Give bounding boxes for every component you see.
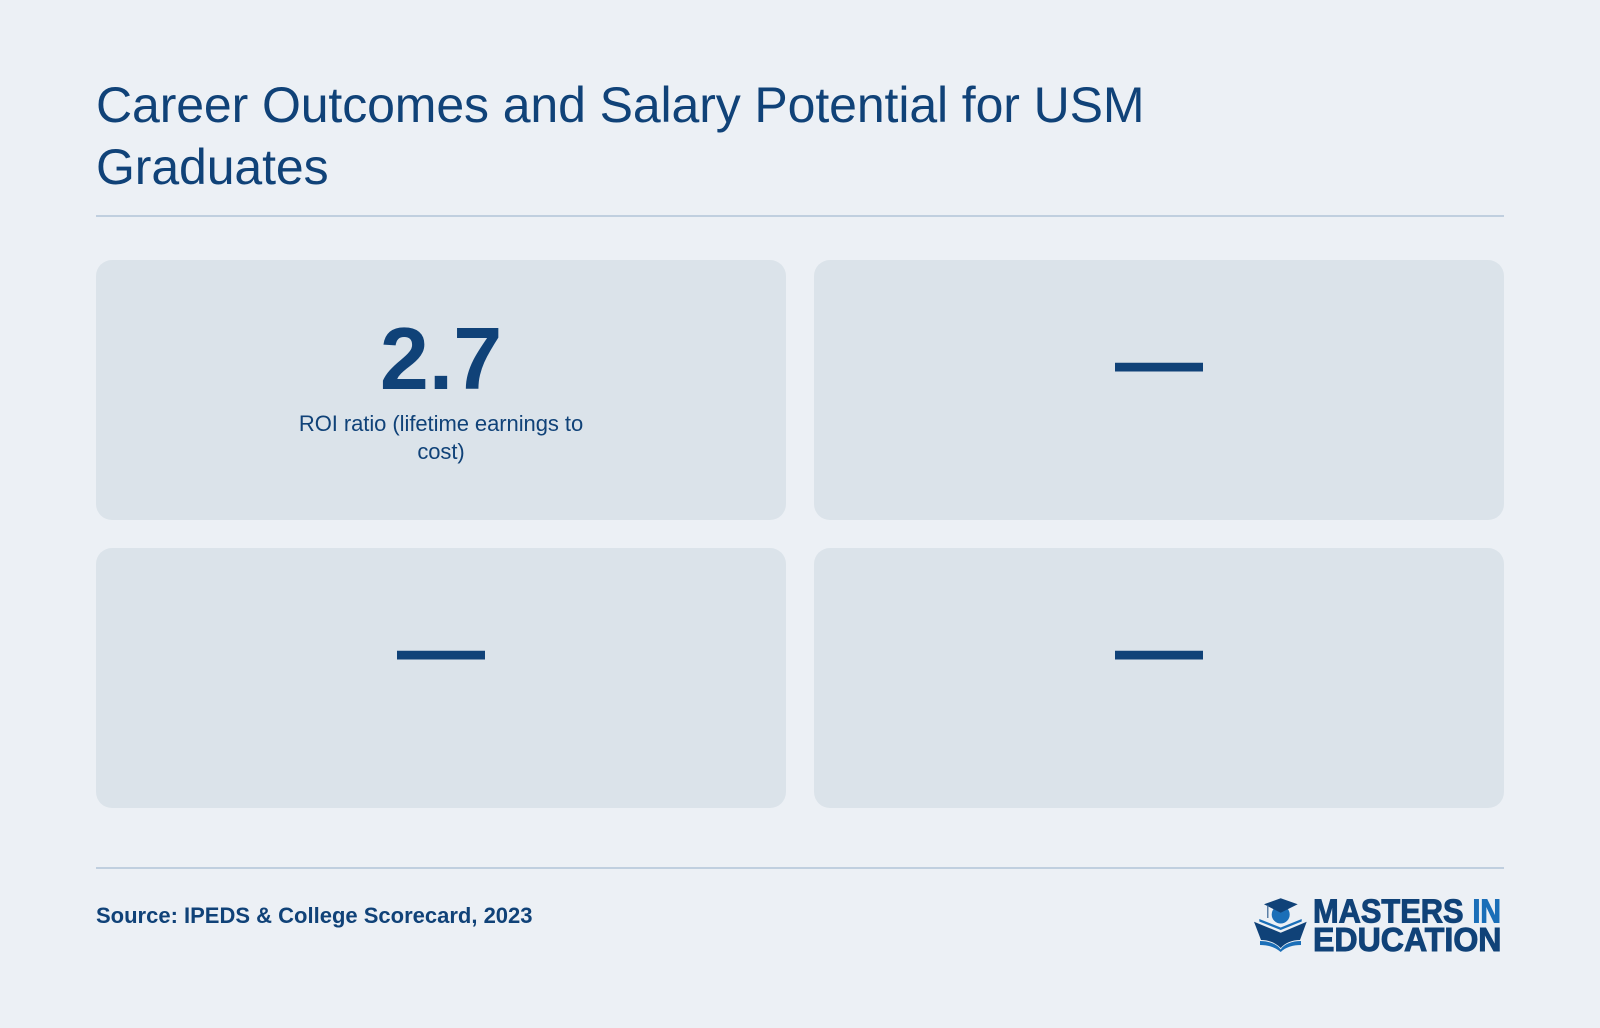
panel: empty stat bottom left: [96, 548, 786, 808]
title: [96, 77, 1144, 195]
stat value: dash: —: [397, 599, 485, 698]
wordmark: [1313, 894, 1502, 959]
stat value: dash: —: [1115, 599, 1203, 698]
title: Graduates: [96, 139, 328, 195]
wordmark: IN: [1472, 894, 1501, 930]
title: Career Outcomes and Salary Potential for USM: [96, 77, 1144, 133]
wordmark: EDUCATION: [1313, 922, 1502, 959]
wordmark: MASTERS: [1313, 894, 1464, 930]
stat label: ROI ratio: cost): [417, 439, 465, 464]
panel: empty stat bottom right: [814, 548, 1504, 808]
source note: Source: IPEDS & College Scorecard, 2023: [96, 903, 533, 928]
stat label: ROI ratio: ROI ratio (lifetime earnings to: [299, 411, 583, 436]
panel: ROI ratio stat: [96, 260, 786, 520]
stat label: ROI ratio: [299, 411, 583, 464]
stat value: 2.7: 2.7: [380, 309, 502, 408]
icon: graduation cap on open book: [1254, 898, 1307, 952]
panel: empty stat top right: [814, 260, 1504, 520]
stat value: dash: —: [1115, 311, 1203, 410]
logo: Masters in Education: [1254, 894, 1502, 959]
